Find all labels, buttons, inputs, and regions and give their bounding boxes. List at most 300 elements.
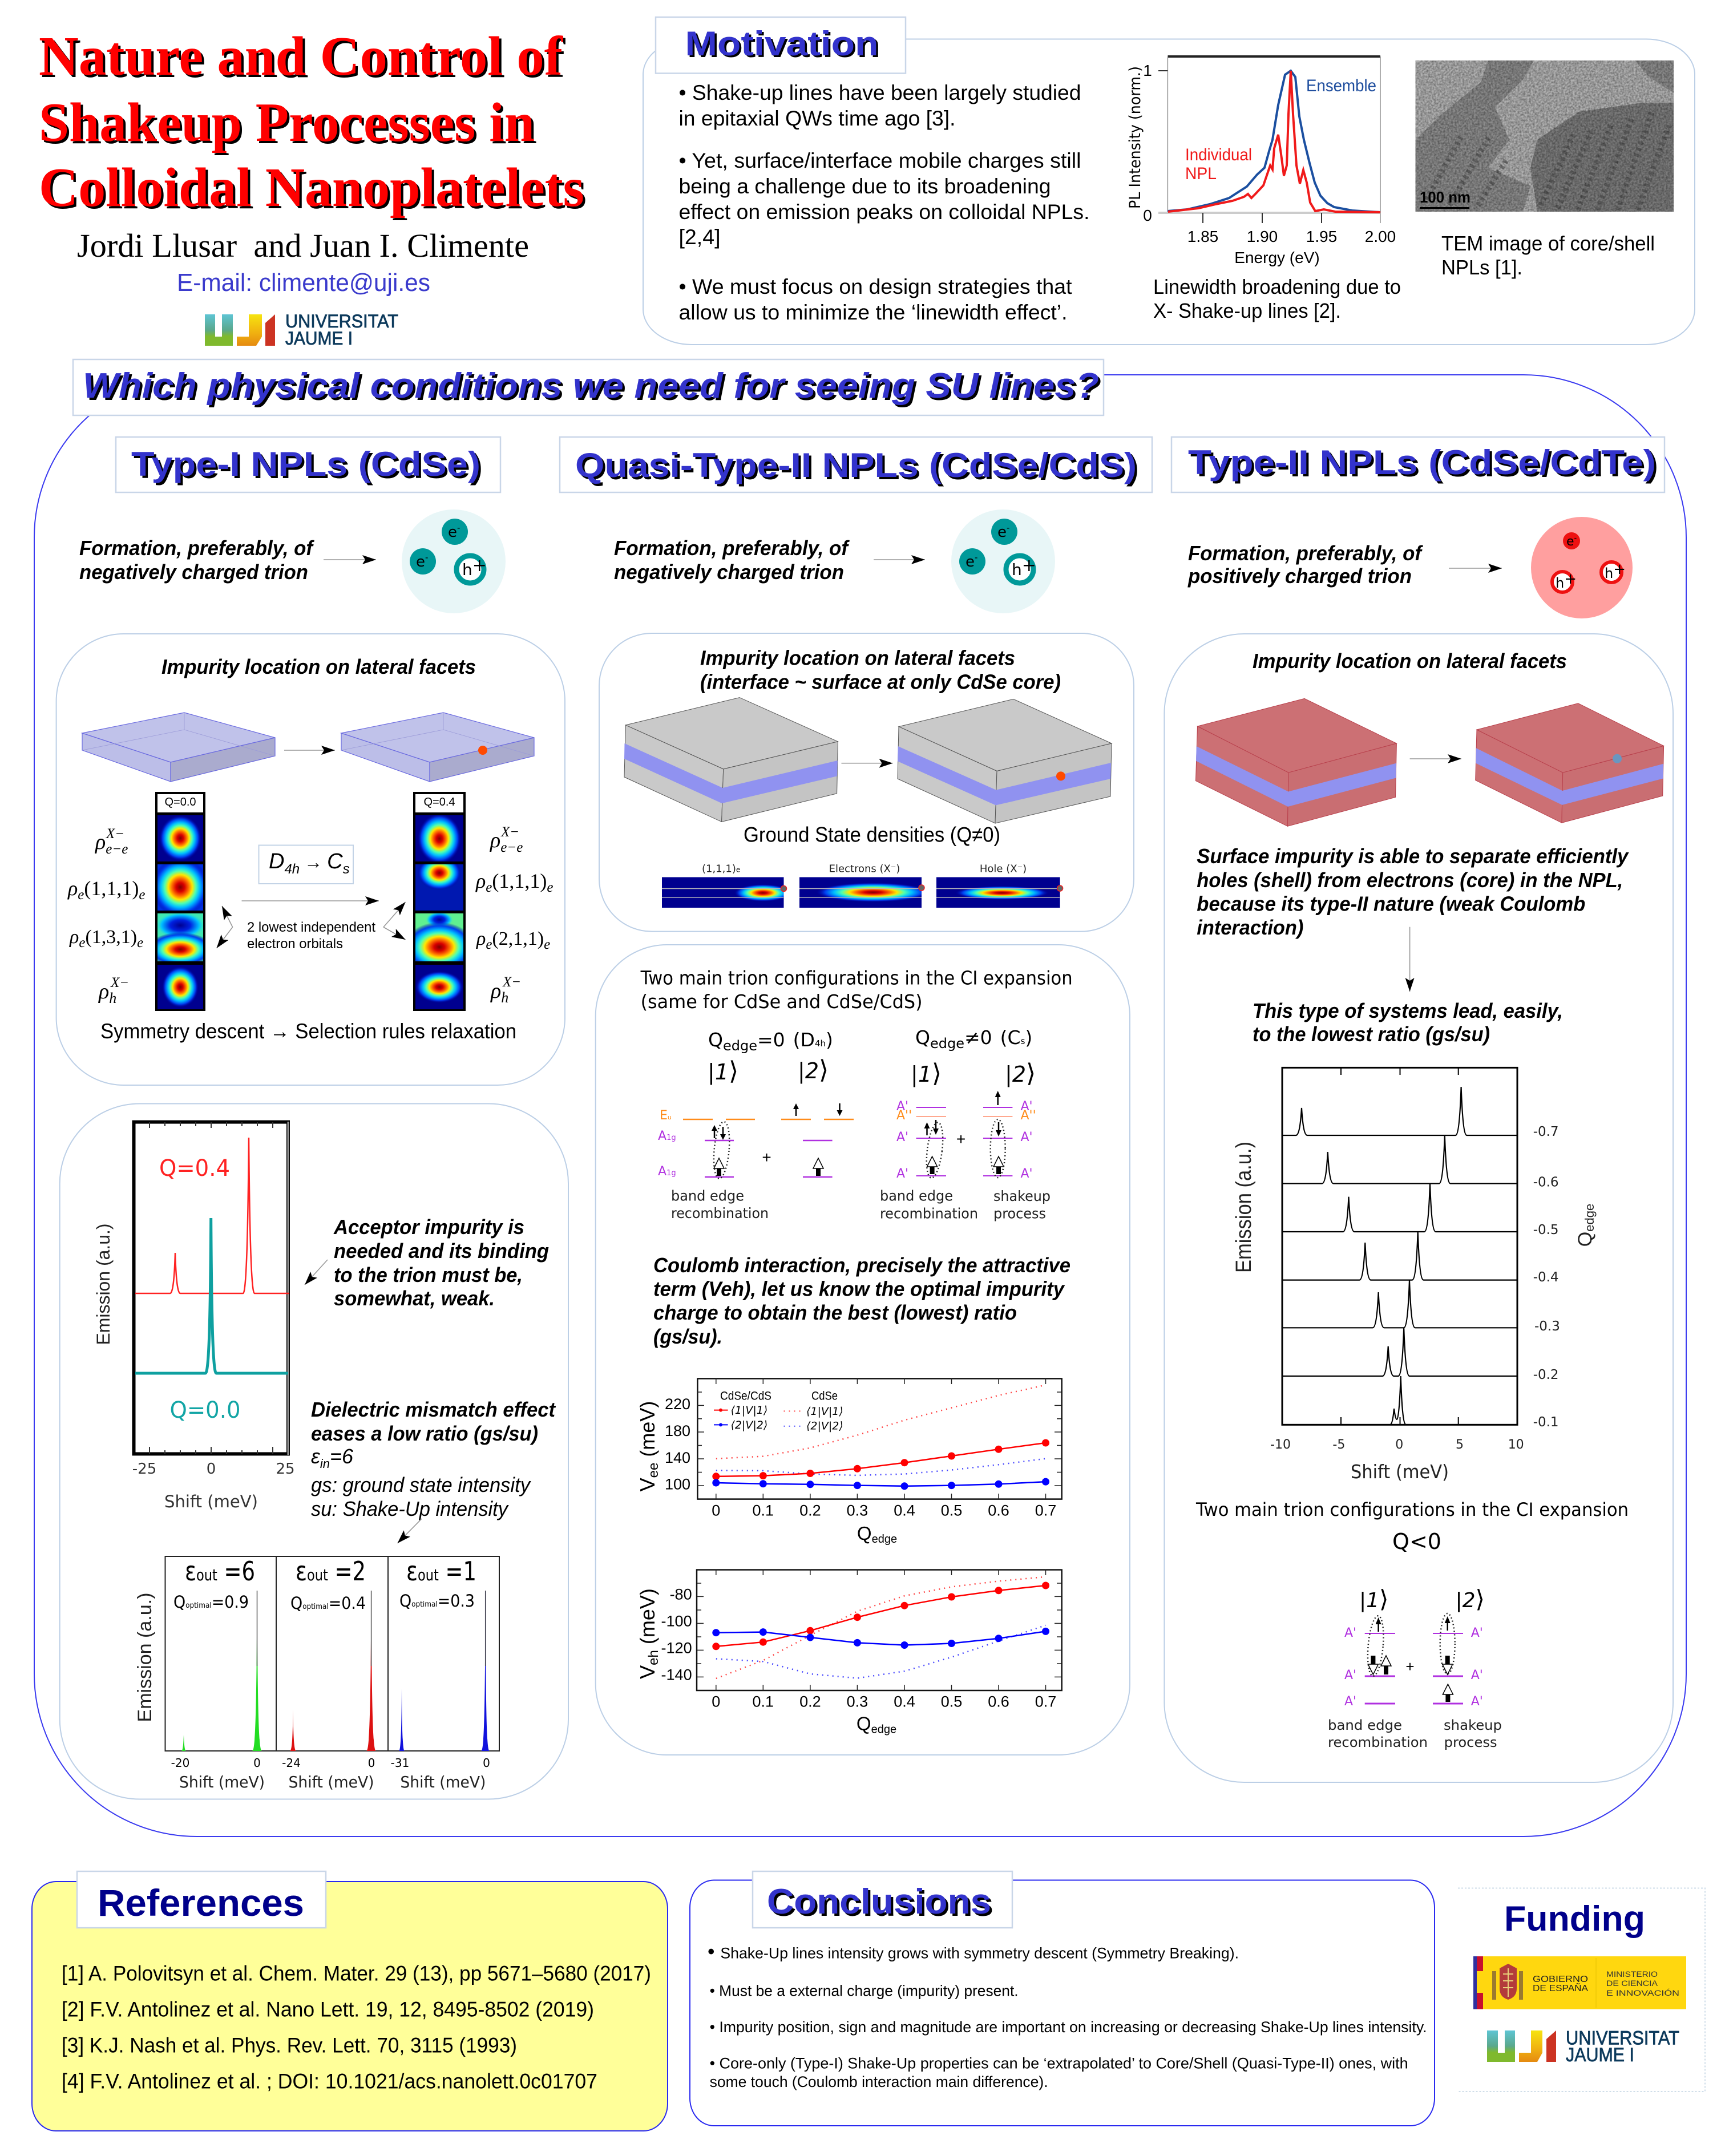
chart: Veh: 0.2 (799, 1693, 821, 1710)
surface impurity note: holes (shell) from electrons (core) in the NPL, (1197, 868, 1623, 892)
density labels: left: X− (106, 826, 124, 842)
chart: Vee: ee (646, 1463, 661, 1478)
slab: core/shell with impurity (898, 699, 1112, 823)
trion icon: column 2: e (965, 553, 975, 571)
trion icon: column 3: e (1566, 535, 1574, 549)
chart: Vee: 100 (665, 1476, 690, 1493)
heading (640, 967, 1073, 1013)
chart: Veh: eh (646, 1650, 661, 1665)
references heading (77, 1871, 326, 1928)
label: shakeup process Q<0: process (1444, 1734, 1497, 1750)
spectrum chart: dielectric: Qoptimal=0.9 (173, 1592, 249, 1612)
chart: emission vs Qedge: -0.2 (1533, 1368, 1559, 1382)
chart: Vee: 0.1 (753, 1502, 774, 1519)
heading: Impurity location on lateral facets (700, 646, 1015, 670)
level diagram: Cs: + (956, 1130, 965, 1148)
chart: Veh: 0.7 (1035, 1693, 1056, 1710)
chart: Veh: -140 (661, 1666, 692, 1683)
kets: |2⟩ (1005, 1059, 1036, 1088)
spectrum chart: dielectric: Qoptimal=0.4 (290, 1593, 366, 1613)
density maps: Q=0.4 (413, 792, 466, 1011)
spectrum chart: dielectric: Shift (meV) (400, 1773, 486, 1791)
caption: linewidth: X- Shake-up lines [2]. (1153, 299, 1341, 322)
density labels: left: e (139, 887, 145, 903)
motivation heading: Motivation (687, 26, 880, 64)
density labels: right: h (501, 989, 508, 1006)
level diagram: Cs (896, 1091, 1036, 1181)
density labels: right: ρ (476, 869, 486, 892)
density labels: right: ρ (491, 979, 501, 1003)
level diagram: Cs: A' (896, 1099, 908, 1114)
density labels: right: e (486, 937, 492, 952)
motivation bullets: being a challenge due to its broadening (679, 175, 1051, 198)
chart: Veh: 0.5 (941, 1693, 962, 1710)
label: shakeup process: process (993, 1206, 1046, 1222)
Coulomb note: term (Veh), let us know the optimal impurity (653, 1277, 1065, 1301)
title: Nature and Control of (39, 26, 563, 87)
density labels: left: ρ (95, 830, 106, 854)
trion icon: column 3: - (1574, 534, 1577, 543)
trion icon: column 3: h (1556, 575, 1564, 591)
references heading: References (98, 1882, 304, 1924)
heading: (same for CdSe and CdSe/CdS) (641, 990, 923, 1013)
chart: PL intensity: 1.95 (1306, 228, 1337, 245)
configurations heading: Two main trion configurations in the CI expansion (1195, 1499, 1629, 1520)
chart: Veh: -80 (670, 1586, 692, 1603)
chart: PL intensity: 1.85 (1187, 228, 1218, 245)
chart: Vee: 0.7 (1035, 1502, 1056, 1519)
density labels: left: ρ (70, 927, 79, 948)
logo: Gobierno de España (1473, 1956, 1686, 2009)
chart: Vee: Q (857, 1523, 872, 1544)
label: band edge recombination Q<0: band edge (1328, 1717, 1402, 1733)
chart: emission vs Qedge: -0.4 (1533, 1270, 1559, 1285)
chart: emission vs Qedge: -0.5 (1533, 1223, 1559, 1237)
panel: motivation (643, 17, 1695, 345)
density labels: left: e (78, 887, 84, 903)
orbital note (247, 920, 375, 952)
note: dielectric mismatch: su: Shake-Up intensity (311, 1497, 509, 1520)
slab: no impurity (82, 713, 275, 782)
note: dielectric mismatch: gs: ground state intensity (311, 1473, 531, 1496)
trion icon: column 1: - (425, 552, 428, 563)
heading: Quasi-Type-II: Quasi-Type-II NPLs (CdSe/CdS) (577, 448, 1139, 487)
chart: Vee: 140 (665, 1449, 690, 1466)
spectrum chart: Q dependence: Q=0.0 (170, 1397, 241, 1423)
panel: Quasi-Type-II impurity location (599, 633, 1134, 932)
heading: Type-II: Type-II NPLs (CdSe/CdTe) (1188, 443, 1656, 482)
chart: Vee: 220 (665, 1395, 690, 1413)
chart: Veh (636, 1570, 1062, 1736)
heading: Impurity location on lateral facets (161, 655, 476, 678)
chart: emission vs Qedge: Q (1574, 1232, 1596, 1247)
surface impurity note: interaction) (1197, 916, 1303, 939)
densities label: Ground State densities (Q≠0) (744, 823, 1000, 847)
chart: Vee: ⟨2|V|2⟩ (806, 1420, 843, 1433)
lowest ratio note: to the lowest ratio (gs/su) (1253, 1022, 1490, 1046)
level diagram: Q<0: A' (1471, 1626, 1483, 1640)
panel: references (32, 1871, 668, 2131)
level diagram: Q<0: A' (1471, 1668, 1483, 1682)
Coulomb note: Coulomb interaction, precisely the attractive (653, 1253, 1070, 1277)
density labels: left: (1,3,1) (85, 927, 137, 948)
label: band edge recombination Cs: band edge (880, 1188, 953, 1204)
chart: emission vs Qedge: -5 (1332, 1438, 1345, 1452)
surface impurity note: because its type-II nature (weak Coulomb (1197, 892, 1585, 915)
panel: Type-II (1164, 634, 1673, 1782)
surface impurity note (1197, 844, 1629, 939)
heading: Qedge≠0: (Cs) (1000, 1026, 1032, 1049)
chart: Veh: 0.4 (894, 1693, 915, 1710)
density labels: left: h (109, 990, 116, 1006)
chart: emission vs Qedge: 5 (1456, 1438, 1464, 1452)
orbital note: 2 lowest independent (247, 920, 375, 935)
heading: Qedge≠0: edge (930, 1035, 964, 1051)
level diagram: Q<0: A' (1344, 1626, 1356, 1640)
heading: Quasi-Type-II (560, 437, 1152, 492)
density labels: right: X− (500, 824, 519, 840)
trion icon: column 1 (402, 509, 506, 613)
chart: Vee: V (636, 1478, 659, 1491)
level diagram: Cs: A' (896, 1167, 908, 1181)
trion icon: column 3: h (1605, 565, 1613, 581)
spectrum chart: dielectric: 0 (368, 1756, 375, 1770)
logo: Universitat Jaume I: JAUME I (285, 328, 353, 349)
chart: Vee: 0.3 (847, 1502, 868, 1519)
density strips: (1,1,1)e (702, 863, 740, 875)
conclusion bullets: • Impurity position, sign and magnitude are important on increasing or decreasing Shake-Up lines intensity. (710, 2019, 1427, 2036)
chart: PL intensity: 1.90 (1247, 228, 1278, 245)
level diagram: Cs: A'' (1020, 1109, 1036, 1123)
chart: Vee (636, 1378, 1062, 1546)
note: acceptor impurity: Acceptor impurity is (333, 1215, 524, 1239)
density strips (662, 863, 1063, 908)
spectrum chart: Q dependence: Emission (a.u.) (93, 1223, 114, 1345)
spectrum chart: dielectric: εout =6 (185, 1556, 255, 1587)
label: band edge recombination: band edge (671, 1188, 744, 1204)
chart: Vee: (meV) (636, 1401, 659, 1463)
trion icon: column 3: + (1564, 571, 1577, 588)
logo: Gobierno de España: E INNOVACIÓN (1606, 1988, 1679, 1997)
trion icon: column 2: + (1022, 556, 1036, 576)
motivation bullets (679, 81, 1090, 324)
note: dielectric mismatch: eases a low ratio (gs/su) (311, 1422, 538, 1445)
symmetry box: 4h (284, 861, 300, 877)
conclusion bullets (708, 1939, 1427, 2090)
reference list: [4] F.V. Antolinez et al. ; DOI: 10.1021/acs.nanolett.0c01707 (62, 2070, 597, 2093)
chart: emission vs Qedge: Shift (meV) (1351, 1461, 1449, 1483)
density labels: left: e (137, 935, 143, 950)
heading: Type-II (1171, 437, 1665, 492)
level diagram: Q<0: |1⟩ (1359, 1585, 1388, 1613)
arrow (324, 559, 376, 560)
chart: Vee: 0.2 (799, 1502, 821, 1519)
level diagram: Q<0: A' (1344, 1668, 1356, 1682)
label: band edge recombination (671, 1188, 769, 1221)
slab: type-II with impurity (1476, 703, 1664, 823)
label: shakeup process Q<0: shakeup (1444, 1717, 1502, 1733)
title: Colloidal Nanoplatelets (39, 157, 584, 219)
spectrum chart: dielectric: -24 (282, 1756, 301, 1770)
arrow (305, 1260, 328, 1285)
chart: Vee: ⟨1|V|1⟩ (806, 1405, 843, 1418)
chart: Veh: (meV) (636, 1588, 659, 1650)
heading: Qedge≠0: ≠0 (964, 1026, 992, 1049)
motivation bullets: allow us to minimize the ‘linewidth effect’. (679, 301, 1067, 324)
panel: Quasi-Type-II configurations (596, 945, 1130, 1755)
trion icon: column 1: + (472, 556, 487, 576)
heading (700, 646, 1061, 694)
conclusion bullets: • Core-only (Type-I) Shake-Up properties can be ‘extrapolated’ to Core/Shell (Quasi-Type-II) ones, with (710, 2055, 1408, 2072)
chart: PL intensity: Ensemble (1306, 76, 1376, 95)
spectrum chart: dielectric: -31 (391, 1756, 409, 1770)
label: band edge recombination Cs (880, 1188, 978, 1222)
chart: Vee: ⟨1|V|1⟩ (730, 1404, 767, 1417)
note: acceptor impurity: somewhat, weak. (334, 1287, 495, 1310)
spectrum chart: Q dependence: 0 (207, 1461, 216, 1478)
arrow (841, 763, 892, 764)
arrow (1409, 927, 1411, 992)
trion icon: column 1: e (448, 524, 457, 541)
density labels: left: ρ (68, 877, 78, 900)
chart: Vee: edge (872, 1533, 897, 1546)
chart: Veh: V (636, 1665, 659, 1679)
symmetry conclusion: Symmetry descent → Selection rules relaxation (100, 1020, 516, 1043)
Coulomb note: charge to obtain the best (lowest) ratio (653, 1301, 1017, 1324)
arrow (1449, 568, 1502, 569)
symmetry box: → (304, 852, 322, 872)
density maps: Q=0.0 (155, 792, 205, 1011)
heading: Qedge=0: Q (708, 1029, 723, 1051)
density labels: right: (1,1,1) (492, 869, 547, 892)
chart: Vee: 180 (665, 1422, 690, 1439)
formation text: column 2: negatively charged trion (614, 560, 844, 584)
logo: Gobierno de España: DE CIENCIA (1606, 1979, 1658, 1988)
level diagram: Cs: A' (1020, 1130, 1033, 1144)
motivation bullets: [2,4] (679, 225, 720, 249)
caption: TEM: TEM image of core/shell (1441, 232, 1655, 255)
main question heading (73, 359, 1104, 415)
formation text: column 1: negatively charged trion (79, 560, 308, 584)
spectrum chart: Q dependence: -25 (132, 1461, 156, 1478)
chart: Vee: 0.6 (988, 1502, 1009, 1519)
logo: Universitat Jaume I: JAUME I (1566, 2044, 1634, 2066)
kets: |2⟩ (798, 1055, 829, 1085)
reference list: [2] F.V. Antolinez et al. Nano Lett. 19, 12, 8495-8502 (2019) (62, 1998, 594, 2021)
chart: Vee: CdSe (811, 1389, 838, 1402)
note: acceptor impurity: to the trion must be, (334, 1263, 523, 1287)
density labels: right: X− (502, 974, 521, 990)
conclusion bullets: • Shake-Up lines intensity grows with symmetry descent (Symmetry Breaking). (708, 1939, 1239, 1963)
formation text: column 2: Formation, preferably, of (614, 536, 850, 560)
spectrum chart: Q dependence (93, 1122, 295, 1511)
density maps: Q=0.0: Q=0.0 (164, 796, 196, 808)
motivation bullets: in epitaxial QWs time ago [3]. (679, 107, 955, 130)
caption: linewidth (1153, 275, 1401, 322)
chart: PL intensity: 0 (1143, 207, 1152, 224)
TEM image: 100 nm (1420, 188, 1471, 206)
caption: TEM: NPLs [1]. (1441, 256, 1522, 279)
heading: Qedge≠0: Q (915, 1026, 930, 1049)
level diagram: Cs: A'' (896, 1109, 912, 1123)
chart: emission vs Qedge: edge (1582, 1204, 1597, 1232)
chart: Veh: edge (871, 1723, 896, 1736)
chart: Veh: 0 (712, 1693, 720, 1710)
chart: emission vs Qedge: 0 (1395, 1438, 1403, 1452)
Coulomb note: (gs/su). (653, 1325, 722, 1348)
heading: Qedge=0: edge (723, 1038, 757, 1054)
spectrum chart: dielectric: 0 (483, 1756, 490, 1770)
logo: Gobierno de España: GOBIERNO (1533, 1975, 1588, 1984)
motivation bullets: • Shake-up lines have been largely studied (679, 81, 1081, 104)
kets (708, 1055, 1036, 1088)
chart: emission vs Qedge: -0.7 (1533, 1124, 1559, 1139)
motivation heading (656, 17, 906, 73)
email: E-mail: climente@uji.es (177, 269, 430, 297)
TEM image (1415, 60, 1674, 212)
spectrum chart: dielectric: εout =2 (296, 1556, 366, 1587)
heading: Type-I: Type-I NPLs (CdSe) (134, 447, 483, 486)
spectrum chart: dielectric: Shift (meV) (289, 1773, 374, 1791)
funding heading: Funding (1504, 1899, 1645, 1939)
chart: emission vs Qedge: Emission (a.u.) (1232, 1142, 1256, 1273)
note: acceptor impurity (333, 1215, 549, 1310)
chart: Veh: -100 (661, 1613, 692, 1630)
density labels: right: e (544, 937, 550, 952)
heading: Qedge=0: =0 (757, 1029, 785, 1051)
heading: Type-II: Type-II NPLs (CdSe/CdTe) (1190, 446, 1658, 484)
heading: Qedge=0: (D4h) (793, 1029, 833, 1051)
conclusion bullets: • Must be a external charge (impurity) present. (710, 1982, 1019, 1999)
note: dielectric mismatch (311, 1398, 556, 1520)
reference list: [3] K.J. Nash et al. Phys. Rev. Lett. 70, 3115 (1993) (62, 2033, 517, 2057)
logo: Universitat Jaume I (205, 311, 398, 349)
heading: Quasi-Type-II: Quasi-Type-II NPLs (CdSe/CdS) (575, 446, 1137, 484)
symmetry box: D (269, 850, 284, 873)
density labels: right: e (486, 880, 492, 895)
chart: PL intensity: Individual (1185, 145, 1252, 164)
arrow (397, 1519, 422, 1543)
chart: Veh: 0.1 (753, 1693, 774, 1710)
formation text: column 3: Formation, preferably, of (1188, 541, 1423, 565)
arrows: lowest orbitals left (217, 906, 233, 948)
label: band edge recombination Cs: recombination (880, 1206, 978, 1222)
conclusions heading (753, 1871, 1012, 1928)
title: Shakeup Processes in (39, 92, 535, 153)
main question heading: Which physical conditions we need for seeing SU lines? (85, 369, 1101, 408)
logo: Universitat Jaume I: UNIVERSITAT (285, 311, 398, 331)
chart: emission vs Qedge: 10 (1508, 1438, 1524, 1452)
spectrum chart: Q dependence: Shift (meV) (164, 1492, 258, 1511)
spectrum chart: Q dependence: 25 (276, 1461, 295, 1478)
logo: Gobierno de España: MINISTERIO (1606, 1969, 1658, 1979)
heading: Two main trion configurations in the CI expansion (640, 967, 1073, 989)
spectrum chart: dielectric: Shift (meV) (179, 1773, 265, 1791)
trion icon: column 2: - (1007, 523, 1009, 533)
trion icon: column 1: e (416, 553, 425, 571)
caption: linewidth: Linewidth broadening due to (1153, 275, 1401, 298)
panel: physical conditions (34, 359, 1686, 1837)
spectrum chart: dielectric: Qoptimal=0.3 (399, 1591, 475, 1611)
heading: (interface ~ surface at only CdSe core) (700, 670, 1061, 694)
chart: Vee: 0.4 (894, 1502, 915, 1519)
title: Shakeup Processes in (41, 94, 537, 156)
spectrum chart: dielectric: εout =1 (406, 1556, 476, 1587)
heading: Type-I: Type-I NPLs (CdSe) (131, 445, 480, 483)
panel: Type-I spectra (60, 1103, 568, 1799)
note: acceptor impurity: needed and its binding (334, 1239, 549, 1263)
density labels: right: (2,1,1) (492, 928, 544, 949)
chart: emission vs Qedge: -10 (1270, 1438, 1291, 1452)
density maps: Q=0.4: Q=0.4 (423, 796, 455, 808)
density labels: right: e (547, 880, 553, 895)
label: shakeup process Q<0 (1444, 1717, 1502, 1750)
label: shakeup process (993, 1188, 1051, 1222)
arrow (284, 750, 335, 751)
chart: PL intensity: Energy (eV) (1234, 249, 1320, 266)
heading: Impurity location on lateral facets (1253, 649, 1567, 673)
chart: Veh: -120 (661, 1640, 692, 1657)
spectrum chart: dielectric: -20 (171, 1756, 189, 1770)
spectrum chart: dielectric: 0 (253, 1756, 261, 1770)
level diagram: D4h: Eu (660, 1109, 672, 1123)
trion icon: column 2: - (975, 552, 977, 563)
label: band edge recombination: recombination (671, 1205, 769, 1221)
motivation bullets: effect on emission peaks on colloidal NPLs. (679, 200, 1090, 224)
density strips: Hole (X⁻) (980, 863, 1027, 875)
formation text: column 2 (614, 536, 850, 584)
density labels: left: X− (110, 975, 129, 990)
trion icon: column 3: + (1613, 561, 1626, 578)
title: Nature and Control of (41, 28, 565, 90)
title: Colloidal Nanoplatelets (41, 159, 587, 221)
chart: Vee: CdSe/CdS (720, 1389, 771, 1402)
chart: emission vs Qedge: -0.6 (1533, 1175, 1559, 1190)
note: dielectric mismatch: =6 (330, 1445, 354, 1468)
chart: PL intensity: PL Intensity (norm.) (1126, 66, 1144, 209)
main question heading: Which physical conditions we need for seeing SU lines? (83, 366, 1099, 406)
logo: Universitat Jaume I (1487, 2028, 1679, 2066)
motivation bullets: • Yet, surface/interface mobile charges still (679, 149, 1081, 172)
chart: PL intensity: NPL (1185, 164, 1217, 183)
lowest ratio note (1253, 999, 1563, 1046)
reference list: [1] A. Polovitsyn et al. Chem. Mater. 29 (13), pp 5671–5680 (2017) (62, 1961, 651, 1985)
caption: TEM (1441, 232, 1655, 279)
spectrum chart: dielectric (134, 1556, 499, 1791)
density labels: left: e (79, 935, 85, 950)
chart: PL intensity: 2.00 (1365, 228, 1396, 245)
logo: Universitat Jaume I: UNIVERSITAT (1566, 2028, 1679, 2049)
trion icon: column 1: h (462, 560, 472, 579)
density labels: right (475, 824, 553, 1006)
chart: Veh: 0.3 (847, 1693, 868, 1710)
arrows: lowest orbitals right (383, 902, 406, 940)
chart: Veh: 0.6 (988, 1693, 1009, 1710)
reference list (62, 1961, 651, 2093)
heading: Type-I (116, 437, 500, 492)
chart: emission vs Qedge: -0.1 (1533, 1415, 1559, 1430)
motivation bullets: • We must focus on design strategies that (679, 275, 1072, 298)
trion icon: column 3 (1531, 517, 1633, 618)
symmetry box: s (343, 861, 350, 877)
conclusions heading: Conclusions (767, 1882, 991, 1922)
level diagram: Cs: A' (1020, 1099, 1033, 1114)
level diagram: Q<0: A' (1471, 1694, 1483, 1709)
chart: emission vs Qedge: -0.3 (1534, 1319, 1560, 1334)
label: band edge recombination Q<0 (1328, 1717, 1428, 1750)
chart: PL intensity: 1 (1143, 62, 1152, 79)
arrow (242, 900, 379, 901)
